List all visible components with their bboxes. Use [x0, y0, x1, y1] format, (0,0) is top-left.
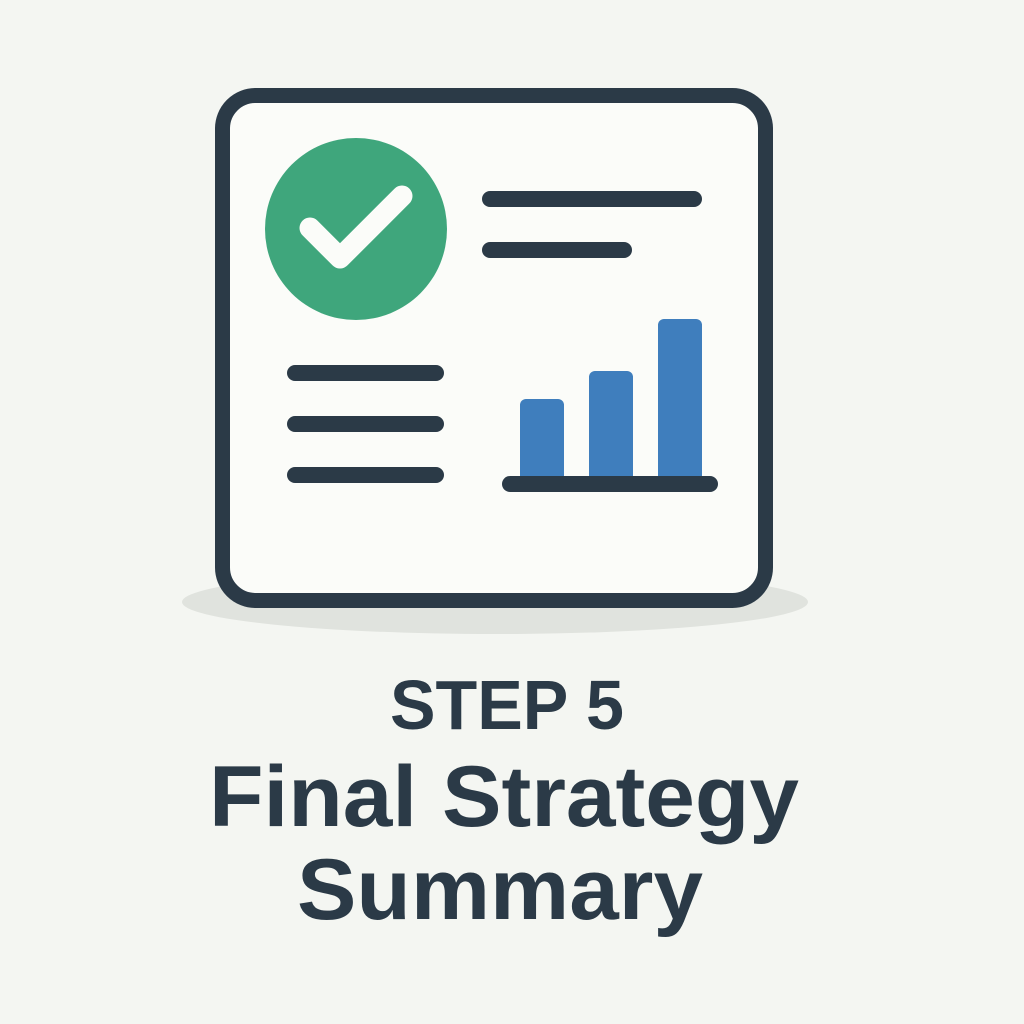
title [209, 749, 799, 938]
text lines: lower left [287, 365, 444, 483]
panel: summary card [222, 96, 766, 600]
text lines: top right [482, 191, 702, 258]
title: Summary [297, 842, 703, 938]
card shadow [182, 570, 808, 634]
icon: green check badge [265, 138, 447, 320]
title: Final Strategy [209, 749, 799, 845]
heading: step label: STEP 5 [390, 666, 624, 744]
bar chart [502, 319, 718, 492]
